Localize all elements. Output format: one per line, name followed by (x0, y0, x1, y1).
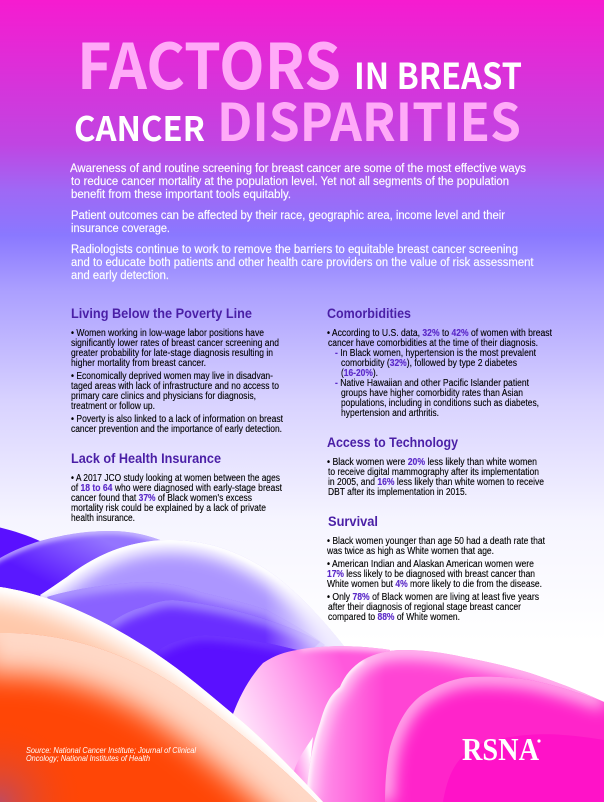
text block: poverty bullets: • Economically deprived women may live in disadvan- (71, 371, 273, 382)
panel: lack of health insurance (71, 451, 282, 524)
text block: insurance bullets (71, 473, 282, 524)
decorative wave: orange shape (0, 580, 340, 802)
text block: survival bullets: was twice as high as White women that age. (326, 546, 494, 557)
logo: RSNA: RSNA (462, 731, 539, 767)
source note: Oncology; National Institutes of Health (26, 754, 150, 763)
heading: survival: Survival (328, 514, 378, 529)
intro text: benefit from these important tools equitably. (71, 187, 291, 201)
intro text: Radiologists continue to work to remove the barriers to equitable breast cancer screening (71, 242, 518, 256)
text block: poverty bullets: higher mortality from breast cancer. (71, 358, 206, 369)
text block: technology bullets: DBT after its implementation in 2015. (328, 487, 467, 498)
text block: survival bullets: 17% less likely to be diagnosed with breast cancer than (327, 569, 535, 580)
text block: comorbidities bullets: populations, including in conditions such as diabetes, (341, 398, 539, 409)
text block: comorbidities bullets: comorbidity (32%), followed by type 2 diabetes (341, 358, 517, 369)
text block: poverty bullets: primary care clinics and physicians for diagnosis, (71, 391, 256, 402)
text block: technology bullets: in 2005, and 16% less likely than white women to receive (328, 477, 544, 488)
text block: technology bullets: to receive digital mammography after its implementation (328, 467, 539, 478)
text block: comorbidities bullets (327, 328, 552, 419)
panel: survival (326, 514, 545, 623)
text block: comorbidities bullets: (16-20%). (341, 368, 378, 379)
text block: insurance bullets: • A 2017 JCO study looking at women between the ages (71, 473, 280, 484)
title: DISPARITIES (217, 81, 521, 156)
text block: comorbidities bullets: • According to U.S. data, 32% to 42% of women with breast (327, 328, 552, 339)
source note: Source: National Cancer Institute; Journal of Clinical (26, 746, 196, 755)
intro text: and to educate both patients and other health care providers on the value of risk assessment (71, 255, 534, 269)
text block: survival bullets: • Only 78% of Black women are living at least five years (327, 592, 539, 603)
decorative wave: pink shapes (225, 640, 604, 802)
text block: technology bullets: • Black women were 20% less likely than white women (327, 457, 537, 468)
panel: comorbidities (327, 306, 552, 419)
text block: insurance bullets: of 18 to 64 who were diagnosed with early-stage breast (71, 483, 282, 494)
text block: poverty bullets: • Women working in low-wage labor positions have (71, 328, 264, 339)
text block: survival bullets: • Black women younger than age 50 had a death rate that (327, 536, 545, 547)
heading: comorbidities: Comorbidities (327, 306, 411, 321)
text block: comorbidities bullets: cancer have comorbidities at the time of their diagnosis. (328, 338, 538, 349)
text block: comorbidities bullets: groups have higher comorbidity rates than Asian (341, 388, 523, 399)
text block: comorbidities bullets: - Native Hawaiian and other Pacific Islander patient (335, 378, 529, 389)
text block: insurance bullets: health insurance. (71, 513, 135, 524)
intro text: to reduce cancer mortality at the population level. Yet not all segments of the population (71, 174, 509, 188)
text block: insurance bullets: mortality risk could be explained by a lack of private (71, 503, 266, 514)
text block: comorbidities bullets: - In Black women, hypertension is the most prevalent (335, 348, 536, 359)
text block: comorbidities bullets: hypertension and arthritis. (341, 408, 439, 419)
text block: poverty bullets: • Poverty is also linked to a lack of information on breast (71, 414, 283, 425)
intro text (70, 161, 534, 282)
text block: survival bullets: • American Indian and Alaskan American women were (327, 559, 534, 570)
title: CANCER (74, 102, 205, 151)
decorative wave: violet shapes (0, 528, 344, 714)
text block: poverty bullets: treatment or follow up. (71, 401, 155, 412)
text block: survival bullets: after their diagnosis of regional stage breast cancer (328, 602, 522, 613)
text block: poverty bullets (71, 328, 283, 435)
intro text: insurance coverage. (71, 221, 170, 235)
title: IN BREAST (354, 49, 522, 100)
heading: technology: Access to Technology (327, 435, 458, 450)
panel: living below the poverty line (71, 306, 283, 435)
title: FACTORS (77, 17, 341, 108)
source note (26, 746, 196, 763)
intro text: Awareness of and routine screening for breast cancer are some of the most effective ways (70, 161, 526, 175)
text block: survival bullets (326, 536, 545, 623)
text block: insurance bullets: cancer found that 37% of Black women's excess (71, 493, 252, 504)
text block: survival bullets: compared to 88% of White women. (328, 612, 460, 623)
intro text: Patient outcomes can be affected by their race, geographic area, income level and their (71, 208, 505, 222)
text block: poverty bullets: taged areas with lack of infrastructure and no access to (71, 381, 279, 392)
heading: insurance: Lack of Health Insurance (71, 451, 221, 466)
intro text: and early detection. (71, 268, 169, 282)
title (74, 17, 522, 156)
text block: poverty bullets: greater probability for late-stage diagnosis resulting in (71, 348, 273, 359)
text block: technology bullets (327, 457, 544, 498)
text block: poverty bullets: significantly lower rates of breast cancer screening and (71, 338, 279, 349)
text block: survival bullets: White women but 4% more likely to die from the disease. (327, 579, 542, 590)
panel: access to technology (327, 435, 544, 498)
heading: poverty: Living Below the Poverty Line (71, 306, 252, 321)
text block: poverty bullets: cancer prevention and the importance of early detection. (71, 424, 282, 435)
